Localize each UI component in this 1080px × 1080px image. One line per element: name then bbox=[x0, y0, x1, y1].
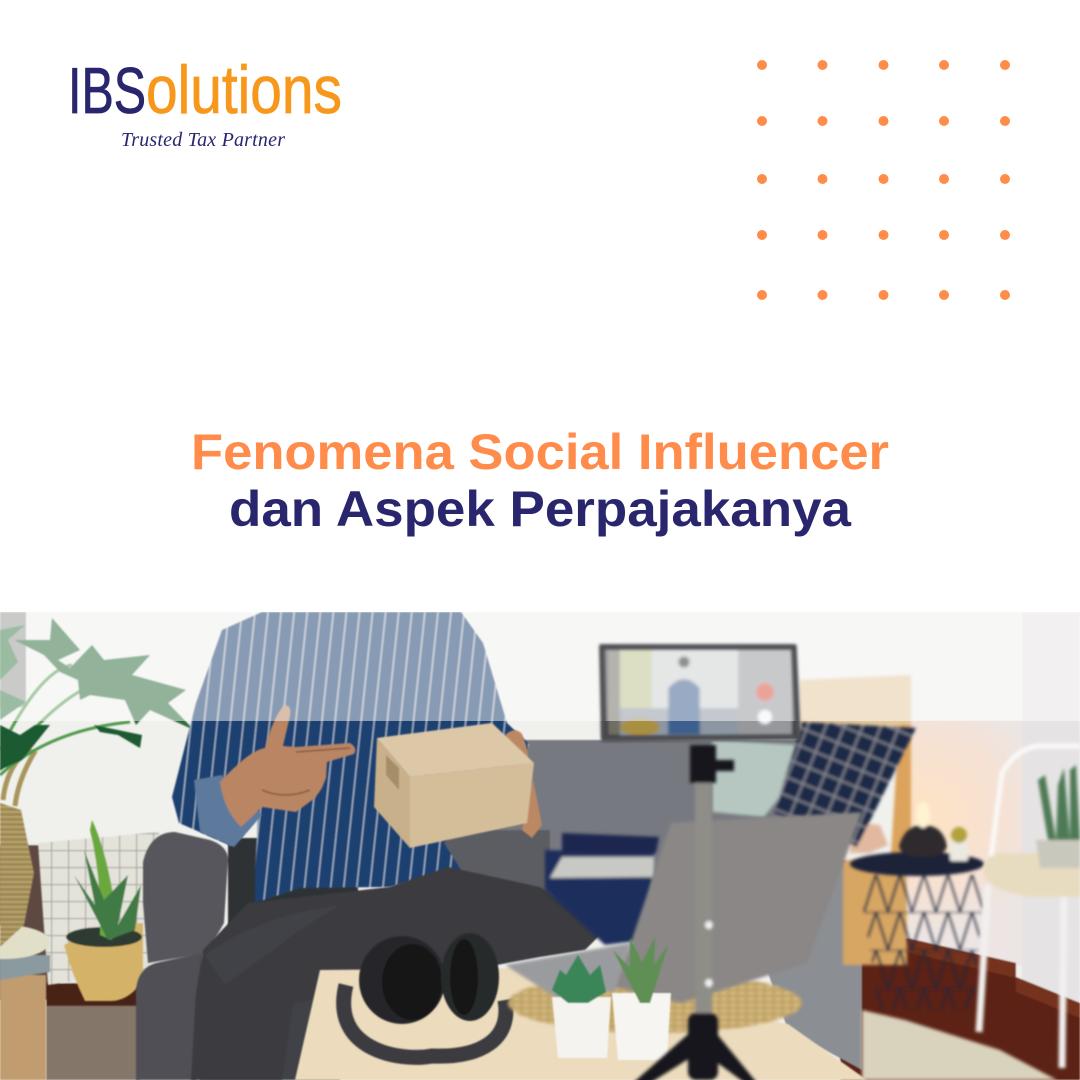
navy plaid pillow bbox=[774, 722, 916, 847]
person on screen bbox=[668, 656, 700, 735]
peach pillow bbox=[850, 822, 888, 853]
cardboard box bbox=[374, 723, 542, 848]
phone tripod bbox=[633, 745, 757, 1080]
shaggy rug bbox=[862, 1010, 1057, 1080]
navy storage box bbox=[545, 833, 659, 945]
shutter circle bbox=[758, 710, 772, 724]
title line 2: dan Aspek Perpajakanya bbox=[229, 481, 852, 537]
small potted plants bbox=[552, 937, 671, 1060]
title bbox=[191, 424, 889, 537]
spiky plant pot bbox=[612, 993, 671, 1060]
lamp bbox=[899, 825, 947, 857]
coffee table bbox=[295, 968, 867, 1080]
white stool with snake plant bbox=[979, 746, 1080, 1068]
smartphone frame bbox=[602, 647, 798, 739]
box hand bbox=[505, 730, 542, 838]
translucent white band across top of photo bbox=[0, 612, 1080, 721]
man's shirt bbox=[172, 612, 530, 903]
pointing hand bbox=[194, 705, 355, 847]
side drum table and hanging basket bbox=[0, 750, 50, 1080]
side table with lamp bbox=[850, 802, 986, 1010]
logo bbox=[68, 52, 342, 151]
left cushion and basket plant bbox=[38, 820, 159, 1001]
throw pillows bbox=[712, 722, 916, 853]
title line 1: Fenomena Social Influencer bbox=[191, 424, 889, 480]
pale green pillow bbox=[712, 740, 798, 817]
headphones bbox=[344, 933, 506, 1057]
decorative dot grid bbox=[757, 60, 1010, 300]
laptop bbox=[505, 812, 862, 1003]
houseplant bbox=[0, 618, 194, 775]
sofa bbox=[136, 740, 862, 1080]
straw mat bbox=[508, 973, 802, 1033]
logo tagline: Trusted Tax Partner bbox=[121, 129, 285, 151]
smartphone screen bbox=[600, 645, 799, 740]
logo wordmark IBS: IBS bbox=[68, 54, 146, 127]
record button bbox=[756, 683, 774, 701]
man's trousers bbox=[191, 867, 605, 1080]
photo: influencer filming a product video bbox=[0, 612, 1080, 1080]
succulent pot bbox=[552, 997, 611, 1058]
neck bbox=[350, 612, 395, 645]
room background bbox=[0, 612, 1080, 1080]
logo wordmark olutions: olutions bbox=[146, 52, 342, 128]
bed headboard bbox=[799, 675, 911, 965]
